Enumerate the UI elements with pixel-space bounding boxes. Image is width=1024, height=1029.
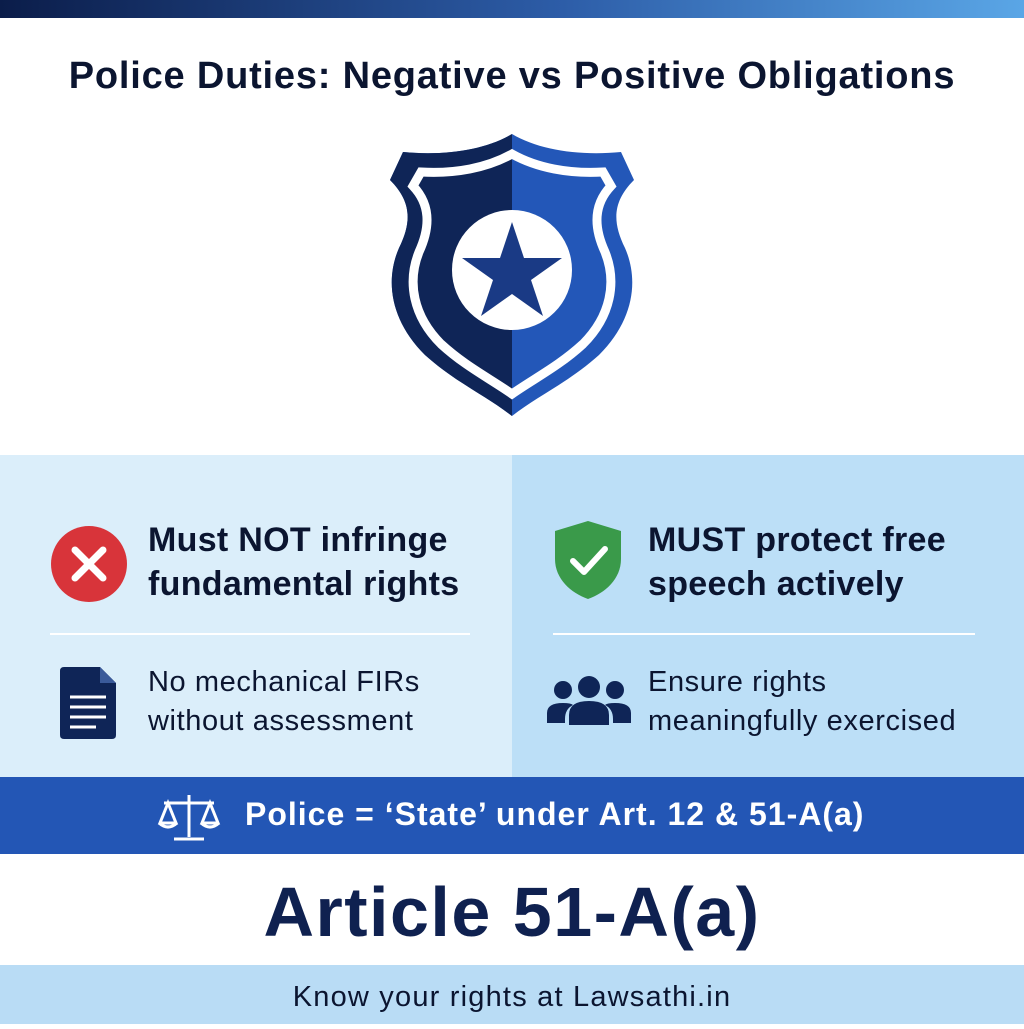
top gradient bar xyxy=(0,0,1024,18)
text xyxy=(648,666,956,737)
title: Police Duties: Negative vs Positive Obligations xyxy=(69,55,955,97)
heading: MUST protect free xyxy=(648,521,946,559)
icon: green shield check xyxy=(555,521,621,599)
icon: people xyxy=(547,676,631,725)
heading: speech actively xyxy=(648,565,904,603)
heading xyxy=(148,521,459,603)
text: without assessment xyxy=(148,705,413,737)
icon: red cross xyxy=(51,526,127,602)
banner text: Police = ‘State’ under Art. 12 & 51-A(a) xyxy=(245,796,864,832)
text: Ensure rights xyxy=(648,666,827,698)
panel: positive obligations xyxy=(512,455,1024,777)
banner: police = state xyxy=(0,777,1024,854)
icon: document xyxy=(60,667,116,739)
text: meaningfully exercised xyxy=(648,705,956,737)
text: No mechanical FIRs xyxy=(148,666,420,698)
heading: fundamental rights xyxy=(148,565,459,603)
text xyxy=(148,666,420,737)
big heading: Article 51-A(a): Article 51-A(a) xyxy=(263,873,761,951)
heading: Must NOT infringe xyxy=(148,521,448,559)
footer xyxy=(0,965,1024,1024)
heading xyxy=(648,521,946,603)
icon: police badge shield xyxy=(390,134,634,416)
footer: Know your rights at Lawsathi.in xyxy=(293,981,731,1013)
panel: negative obligations xyxy=(0,455,512,777)
icon: scales xyxy=(158,795,220,840)
